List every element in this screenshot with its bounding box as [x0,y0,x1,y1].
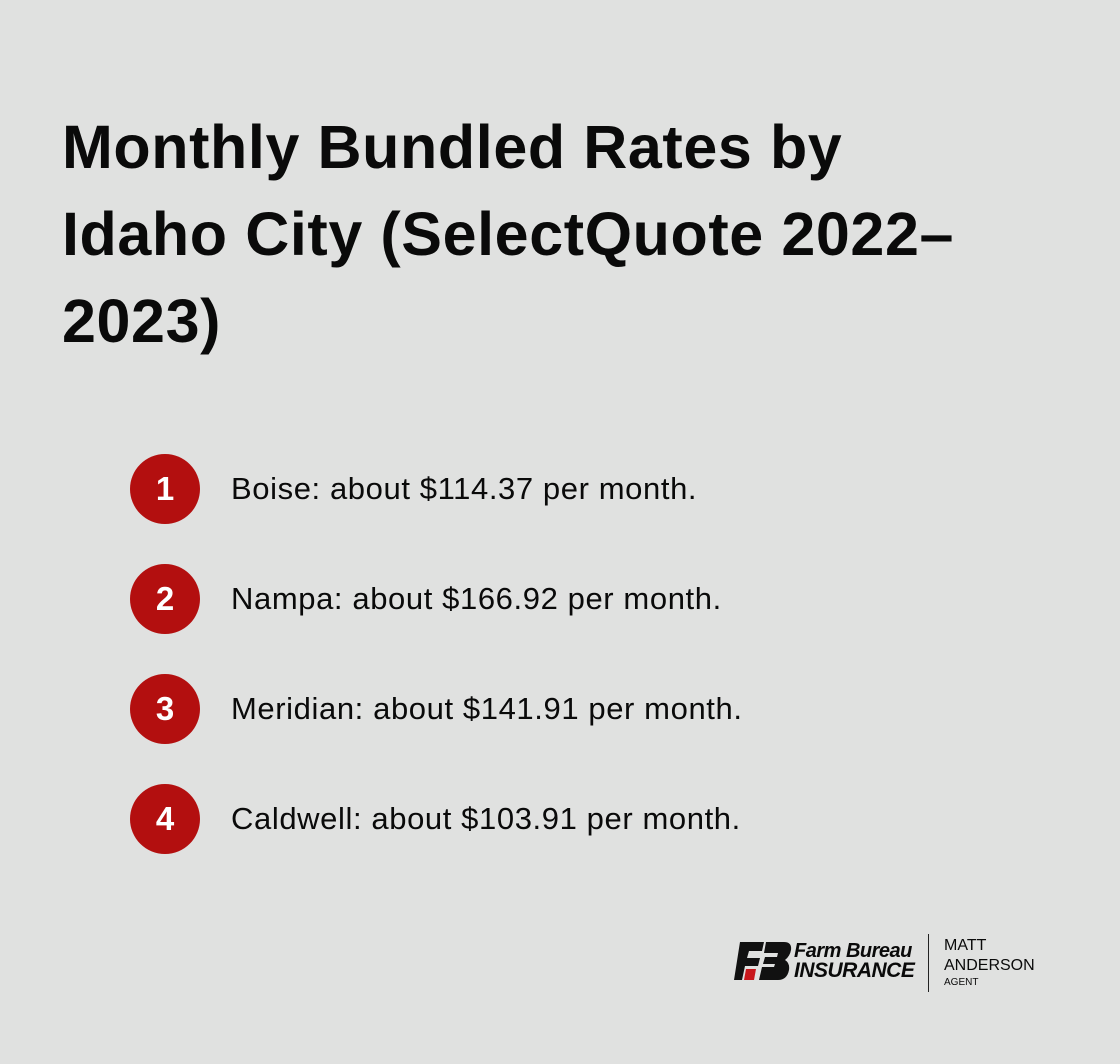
icon: FB mark [734,942,792,980]
list item 4 [130,784,741,854]
list item 1 [130,454,697,524]
list item 2: Nampa: about $166.92 per month. [231,581,722,616]
title: Monthly Bundled Rates by [62,113,842,181]
logo text: INSURANCE [794,959,914,982]
list item 2 [130,564,722,634]
list item 3: 3 [156,690,174,727]
title: 2023) [62,287,221,355]
title: Idaho City (SelectQuote 2022– [62,200,954,268]
logo text [794,940,916,982]
agent name: ANDERSON [944,957,1035,974]
agent name: MATT [944,937,986,954]
agent name: AGENT [944,977,978,988]
list item 2: 2 [156,580,174,617]
agent name [944,937,1035,988]
list item 3 [130,674,743,744]
list item 4: 4 [156,800,174,837]
title [62,113,954,355]
logo [734,934,1035,992]
logo text: Farm Bureau [794,940,912,962]
list item 1: Boise: about $114.37 per month. [231,471,697,506]
list item 3: Meridian: about $141.91 per month. [231,691,743,726]
list item 4: Caldwell: about $103.91 per month. [231,801,741,836]
list item 1: 1 [156,470,174,507]
